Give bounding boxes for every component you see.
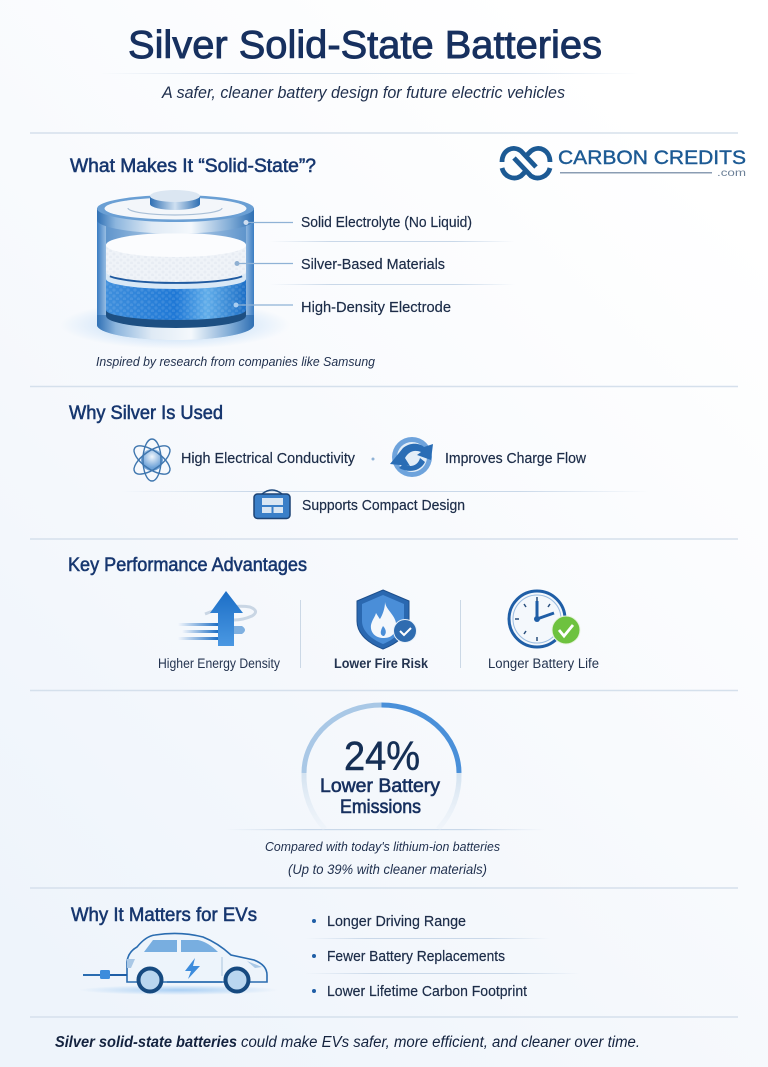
label: supports compact design: Supports Compact Design: [302, 497, 465, 514]
caption: research note: Inspired by research from companies like Samsung: [96, 354, 376, 369]
closing statement: [55, 1034, 640, 1051]
callout: high-density electrode: High-Density Electrode: [301, 299, 451, 316]
logo: Carbon Credits: .com: [717, 168, 746, 179]
stat ring: [304, 705, 459, 829]
list: EV benefits: Lower Lifetime Carbon Footprint: [327, 983, 528, 1000]
divider: [300, 600, 301, 668]
label: higher energy density: Higher Energy Density: [158, 656, 280, 671]
stat label: [320, 776, 440, 818]
icon: charge flow: [390, 437, 433, 477]
icon: atom: [130, 439, 174, 481]
stat label: Lower Battery: [320, 776, 440, 797]
logo: Carbon Credits: CARBON CREDITS: [558, 148, 746, 169]
heading: Why Silver Is Used: Why Silver Is Used: [69, 403, 223, 424]
icon: energy density arrow: [178, 591, 256, 646]
list: EV benefits: Longer Driving Range: [327, 913, 466, 930]
comparison note: [265, 839, 500, 877]
subtitle: A safer, cleaner battery design for future electric vehicles: [161, 83, 565, 102]
icon: compact device: [254, 490, 290, 518]
icon: electric car: [78, 933, 278, 995]
battery illustration: [60, 190, 290, 349]
heading: Key Performance Advantages: Key Performance Advantages: [68, 555, 307, 576]
separator dot: [372, 458, 374, 460]
list: EV benefits: [312, 913, 528, 1000]
icon: clock with check: [509, 591, 580, 647]
comparison note: (Up to 39% with cleaner materials): [288, 861, 487, 877]
logo: Carbon Credits: [502, 148, 746, 179]
callout: silver-based materials: Silver-Based Materials: [301, 256, 445, 273]
closing statement: could make EVs safer, more efficient, and cleaner over time.: [241, 1034, 640, 1051]
label: high electrical conductivity: High Electrical Conductivity: [181, 450, 355, 467]
icon: fire shield: [357, 590, 416, 649]
stat label: Emissions: [340, 797, 421, 818]
comparison note: Compared with today's lithium-ion batteries: [265, 839, 500, 854]
title: Silver Solid-State Batteries: [128, 24, 602, 67]
heading: Why It Matters for EVs: Why It Matters for EVs: [71, 905, 257, 926]
label: longer battery life: Longer Battery Life: [488, 656, 599, 671]
list: EV benefits: Fewer Battery Replacements: [327, 948, 505, 965]
callout: high-density electrode: [234, 299, 451, 316]
label: lower fire risk: Lower Fire Risk: [334, 656, 428, 671]
label: improves charge flow: Improves Charge Flow: [445, 450, 586, 467]
closing statement: Silver solid-state batteries: [55, 1034, 237, 1051]
callout: silver-based materials: [234, 256, 445, 273]
callout: solid electrolyte: Solid Electrolyte (No Liquid): [301, 214, 472, 231]
heading: What Makes It Solid-State: What Makes It “Solid-State”?: [70, 156, 316, 177]
divider: [460, 600, 461, 668]
stat: 24 percent: 24%: [344, 733, 420, 779]
